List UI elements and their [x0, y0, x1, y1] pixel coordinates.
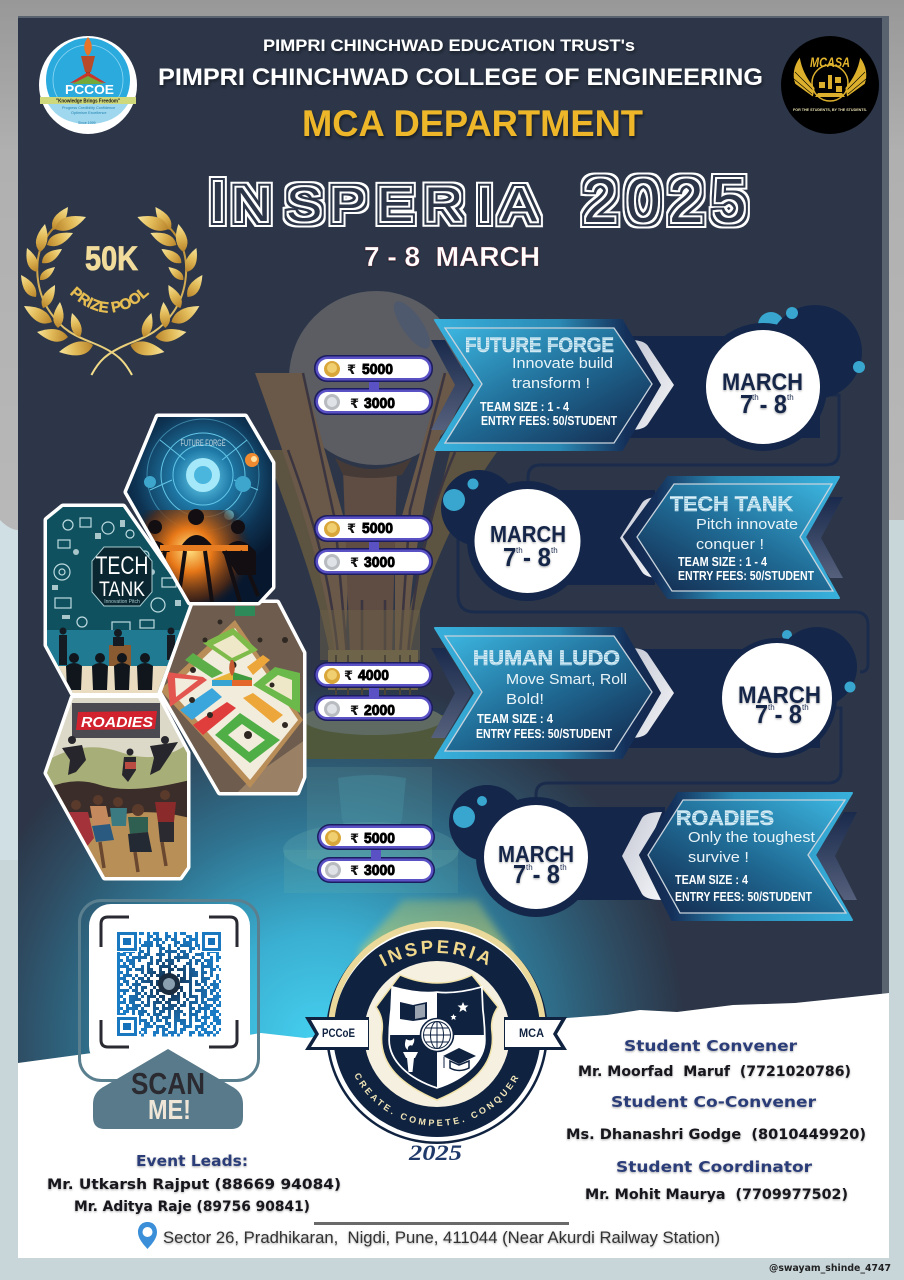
scan me badge: [93, 1049, 243, 1129]
event row: Human Ludo: ENTRY FEES: 50/STUDENT: [476, 726, 612, 741]
event row: Human Ludo: [431, 627, 857, 758]
prize pills: Future Forge: ₹: [350, 397, 359, 412]
logo: MCASA: [781, 36, 879, 134]
tagline: Move Smart, Roll: [506, 671, 627, 688]
emblem motto top: INSPERIA: [378, 940, 488, 966]
ribbon: MCA: MCA: [519, 1028, 544, 1040]
background trophy illustration: [255, 291, 497, 893]
prize pills: Human Ludo: 2000: [364, 702, 395, 719]
icon: globe: [420, 1018, 454, 1052]
student organisers: Mr. Moorfad Maruf (7721020786): [578, 1064, 851, 1080]
photo: Tech Tank: [40, 500, 195, 696]
icon: book: [400, 1002, 427, 1021]
event leads: Event Leads:: [136, 1152, 248, 1170]
prize pills: Future Forge: ₹: [347, 363, 356, 378]
ribbon: MCA: [504, 1017, 567, 1050]
event name: ROADIES: [676, 807, 774, 830]
prize pills: Future Forge: 3000: [364, 395, 395, 412]
banner: [435, 320, 660, 450]
tagline: Only the toughest: [688, 829, 816, 846]
photo: Roadies: ROADIES: [81, 714, 153, 731]
student organisers: Student Co-Convener: [611, 1093, 817, 1111]
banner: [640, 793, 852, 920]
title: Insperia 2025: [209, 167, 746, 236]
event row: Roadies: 7 - 8: [513, 859, 560, 889]
prize pills: Future Forge: 5000: [362, 361, 393, 378]
tagline: Innovate build: [512, 355, 613, 372]
banner: [435, 628, 660, 758]
logo: MCASA: FOR THE STUDENTS, BY THE STUDENTS.: [793, 107, 867, 112]
icon: torch: [403, 1038, 418, 1072]
prize pills: Human Ludo: ₹: [350, 704, 359, 719]
event row: Tech Tank: MARCH: [490, 521, 566, 547]
event row: Human Ludo: MARCH: [738, 682, 821, 709]
prize pills: Future Forge: [314, 355, 433, 415]
event row: Future Forge: th: [752, 393, 759, 402]
event row: Roadies: MARCH: [498, 841, 574, 867]
date bar and blob: [620, 627, 857, 758]
prize pills: Roadies: ₹: [350, 864, 359, 879]
event name: FUTURE FORGE: [465, 334, 614, 357]
icon: location pin: [138, 1222, 157, 1249]
QR card: [80, 900, 258, 1129]
date: 7 - 8 MARCH: [364, 241, 540, 272]
event row: Roadies: ENTRY FEES: 50/STUDENT: [675, 889, 812, 904]
event name: HUMAN LUDO: [473, 647, 620, 670]
header: [158, 36, 763, 144]
title: Insperia 2025: 2025: [583, 167, 746, 236]
prize pills: Human Ludo: ₹: [344, 669, 353, 684]
chevrons: [431, 340, 674, 430]
prize wreath badge: [21, 207, 202, 376]
prize pills: Human Ludo: 4000: [358, 667, 389, 684]
prize pills: Tech Tank: 5000: [362, 520, 393, 537]
banner: [624, 477, 839, 598]
event row: Future Forge: ENTRY FEES: 50/STUDENT: [481, 413, 617, 428]
logo: PCCOE: "Knowledge Brings Freedom": [56, 98, 121, 104]
event row: Tech Tank: th: [516, 546, 523, 555]
date bar and blob: [620, 305, 865, 451]
photo: Future Forge: FUTURE FORGE: [180, 438, 226, 448]
event leads: Mr. Utkarsh Rajput (88669 94084): [47, 1177, 341, 1193]
prize pills: Tech Tank: 3000: [364, 554, 395, 571]
student organisers: Student Coordinator: [616, 1158, 813, 1176]
event row: Human Ludo: th: [802, 703, 809, 712]
icon: stars: [450, 1002, 468, 1020]
emblem motto bottom: CREATE. COMPETE. CONQUER: [355, 1073, 518, 1126]
event row: Tech Tank: th: [551, 546, 558, 555]
student organisers: Student Convener: [624, 1037, 798, 1055]
card: [89, 904, 250, 1068]
QR code: [115, 931, 223, 1038]
prize pills: Roadies: 5000: [364, 830, 395, 847]
event leads: Mr. Aditya Raje (89756 90841): [74, 1199, 310, 1215]
team and fee: TEAM SIZE : 1 - 4: [678, 554, 768, 569]
chevrons: [431, 648, 674, 738]
logo: PCCOE: [39, 36, 137, 134]
event row: Future Forge: th: [787, 393, 794, 402]
emblem: Insperia: [305, 921, 567, 1144]
event row: Future Forge: transform !: [512, 375, 590, 392]
event row: Roadies: survive !: [688, 849, 749, 866]
photo: Human Ludo: [155, 600, 305, 795]
tagline: Pitch innovate: [696, 516, 798, 533]
prize label: PRIZE POOL: [70, 286, 150, 313]
team and fee: TEAM SIZE : 4: [477, 711, 554, 726]
QR frame: [80, 900, 258, 1080]
address divider: [314, 1222, 569, 1225]
date bar and blob: [449, 785, 665, 917]
event row: Human Ludo: th: [768, 703, 775, 712]
date circle: [706, 330, 820, 444]
logo: PCCOE: Since 1999: [78, 121, 96, 125]
prize pills: Roadies: 3000: [364, 862, 395, 879]
wreath branches: [16, 204, 132, 375]
logo: PCCOE: Optimism Excellence: [71, 111, 106, 115]
address: Sector 26, Pradhikaran, Nigdi, Pune, 411044 (Near Akurdi Railway Station): [163, 1229, 720, 1247]
connector lines: [458, 395, 868, 808]
logo: MCASA: MCASA: [810, 54, 850, 70]
prize pills: Human Ludo: [314, 662, 433, 721]
student organisers: Mr. Mohit Maurya (7709977502): [585, 1187, 848, 1203]
event row: Future Forge: [431, 305, 865, 451]
title: Insperia 2025: INSPERIA: [209, 169, 538, 233]
shield: [376, 975, 498, 1100]
photo: Tech Tank: Innovation Pitch: [104, 599, 140, 605]
photo: Future Forge: [125, 415, 275, 605]
heading: department: MCA DEPARTMENT: [302, 103, 643, 144]
photo: Tech Tank: TANK: [99, 578, 145, 601]
team and fee: TEAM SIZE : 1 - 4: [480, 399, 570, 414]
photo: Roadies: [40, 695, 190, 880]
event name: TECH TANK: [670, 493, 793, 516]
emblem year: 2025: [408, 1140, 462, 1165]
event row: Future Forge: 7 - 8: [740, 389, 787, 419]
event leads: [47, 1152, 341, 1215]
event row: Future Forge: MARCH: [722, 369, 803, 396]
torn white lower area: [18, 993, 889, 1258]
prize pills: Tech Tank: [314, 515, 433, 575]
prize pills: Tech Tank: ₹: [350, 556, 359, 571]
event row: Roadies: [449, 785, 857, 920]
date circle: [484, 805, 588, 909]
event row: Tech Tank: 7 - 8: [503, 542, 551, 572]
event row: Human Ludo: Bold!: [506, 691, 544, 708]
event row: Tech Tank: [441, 470, 843, 601]
logo: PCCOE: PCCOE: [65, 82, 114, 97]
prize pills: Roadies: ₹: [350, 832, 359, 847]
heading: college name: PIMPRI CHINCHWAD COLLEGE OF ENGINEERING: [158, 64, 763, 91]
spotlight above emblem: [360, 900, 510, 1000]
student organisers: Ms. Dhanashri Godge (8010449920): [566, 1127, 866, 1143]
event row: Tech Tank: conquer !: [696, 536, 764, 553]
scan text: SCAN: [131, 1066, 205, 1101]
ribbon: PCCoE: [305, 1017, 369, 1050]
chevrons: [620, 497, 843, 578]
icon: graduation cap: [443, 1048, 476, 1070]
date circle: [474, 489, 580, 593]
logo: PCCOE: Progress Credibility Confidence: [62, 106, 115, 110]
prize pills: Roadies: [317, 824, 435, 883]
photo: Tech Tank: TECH: [96, 552, 148, 580]
event row: Roadies: th: [526, 863, 533, 872]
QR card: ME!: [148, 1094, 191, 1125]
ribbon: PCCoE: PCCoE: [322, 1028, 355, 1040]
event row: Roadies: th: [560, 863, 567, 872]
prize pills: Tech Tank: ₹: [347, 522, 356, 537]
event row: Human Ludo: 7 - 8: [755, 699, 802, 729]
heading: trust name: PIMPRI CHINCHWAD EDUCATION TRUST's: [263, 36, 635, 55]
prize amount: 50K: [85, 240, 138, 278]
credit: @swayam_shinde_4747: [769, 1263, 891, 1274]
scanner corners: [101, 917, 237, 1047]
chevrons: [622, 812, 857, 900]
date bar and blob: [441, 470, 655, 601]
date circle: [722, 643, 832, 753]
student organisers: [566, 1037, 866, 1203]
team and fee: TEAM SIZE : 4: [675, 872, 749, 887]
event row: Tech Tank: ENTRY FEES: 50/STUDENT: [678, 568, 814, 583]
